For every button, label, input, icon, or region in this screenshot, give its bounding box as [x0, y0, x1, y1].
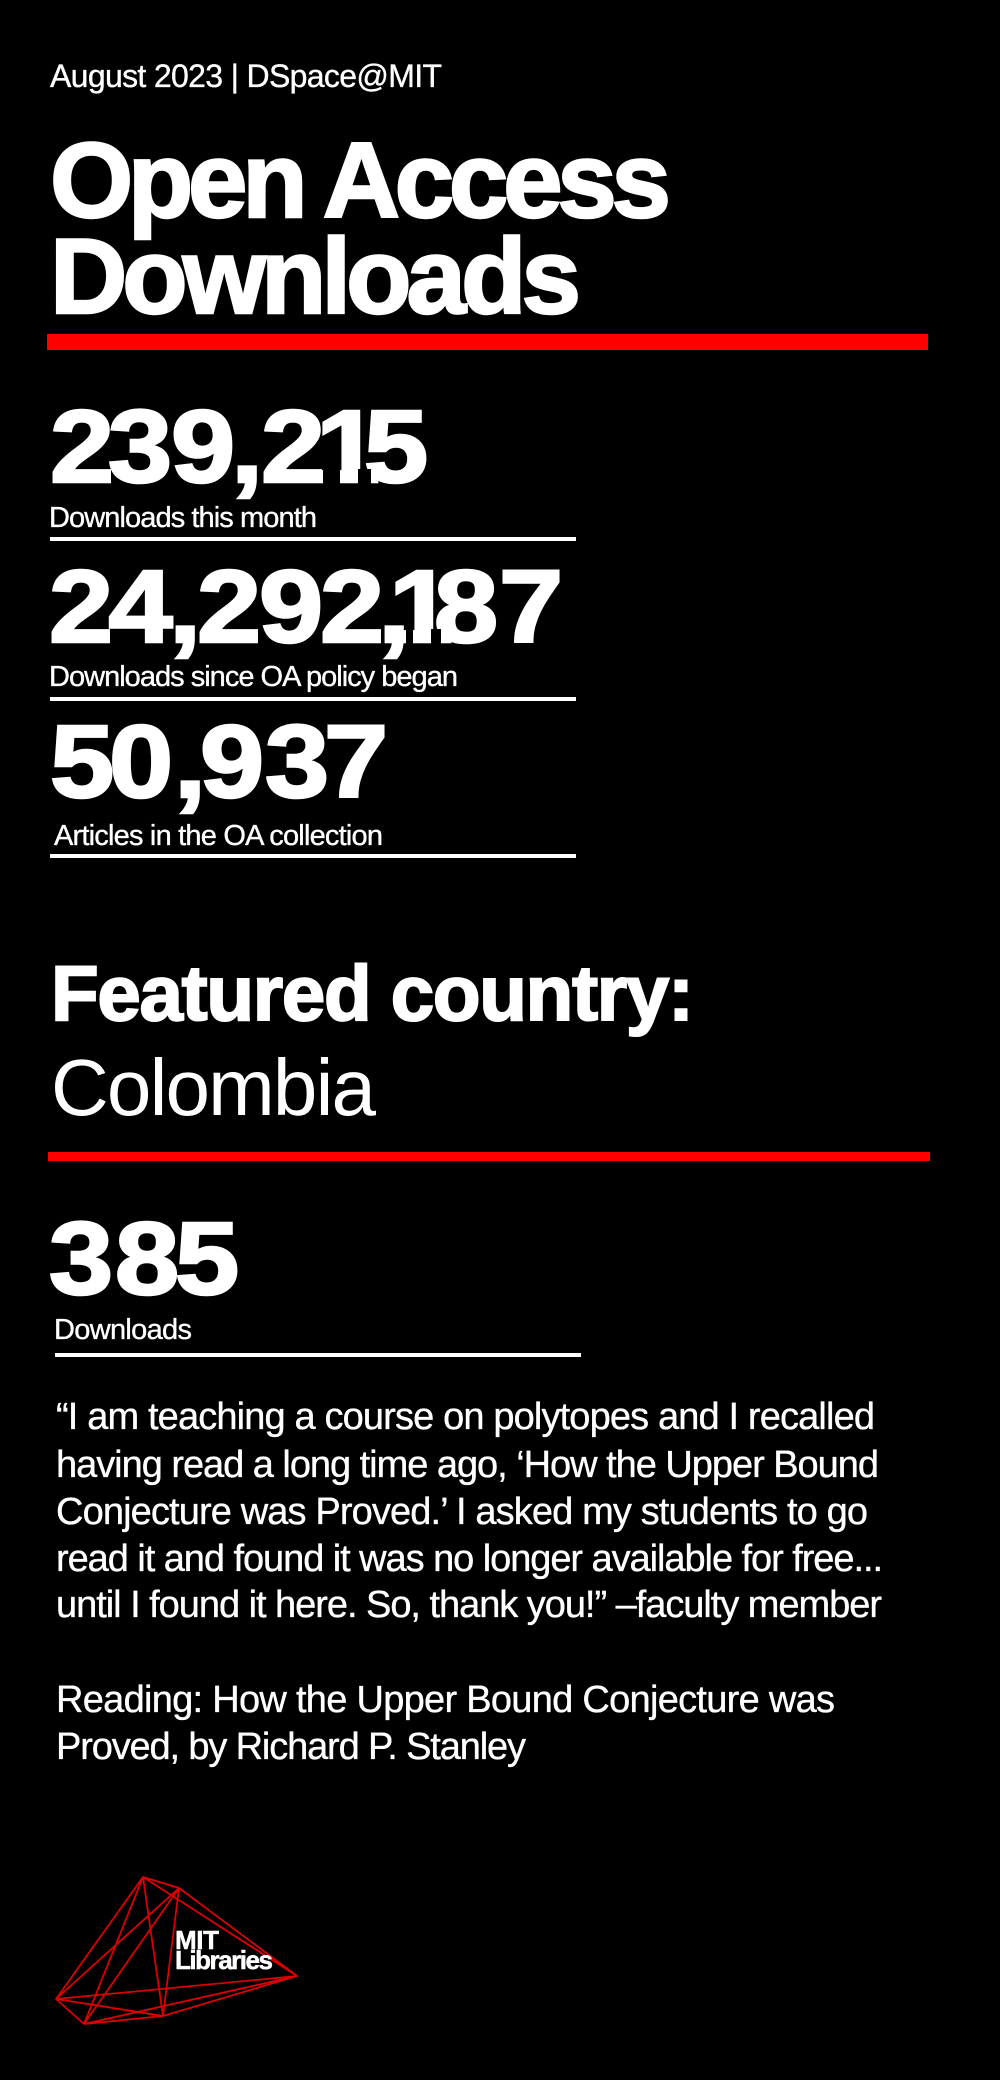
featured country red bar: [48, 1152, 930, 1161]
stat: Colombia downloads: Downloads: [54, 1314, 192, 1346]
title: Open Access: [50, 120, 671, 240]
stat: downloads since OA policy began: Downloads since OA policy began: [49, 661, 458, 693]
title red bar: [47, 334, 928, 350]
title: [50, 120, 671, 336]
title: Downloads: [50, 216, 581, 336]
MIT Libraries logo: [56, 1877, 297, 2024]
featured country heading: Featured country:: [51, 949, 694, 1037]
stat: articles in the OA collection: 50,937: [50, 705, 388, 820]
faculty quote: having read a long time ago, ‘How the Upper Bound: [56, 1444, 879, 1486]
faculty quote: read it and found it was no longer available for free...: [56, 1538, 883, 1580]
stat: downloads since OA policy began: 24,292,187: [49, 550, 563, 665]
stat: articles in the OA collection: [50, 705, 576, 858]
stat: downloads this month: 239,215: [50, 390, 428, 505]
reading citation: Proved, by Richard P. Stanley: [56, 1726, 526, 1768]
stat: downloads this month: Downloads this month: [49, 502, 317, 534]
stat: downloads this month: [49, 390, 576, 541]
reading citation: Reading: How the Upper Bound Conjecture was: [56, 1679, 835, 1721]
faculty quote: Conjecture was Proved.’ I asked my students to go: [56, 1491, 868, 1533]
stat: Colombia downloads: [49, 1202, 581, 1357]
reading citation: [56, 1679, 835, 1768]
MIT Libraries logo: MIT: [175, 1925, 219, 1955]
date and source line: August 2023 | DSpace@MIT: [50, 58, 442, 94]
featured country heading: [51, 949, 694, 1132]
MIT Libraries logo: Libraries: [175, 1945, 273, 1975]
faculty quote: “I am teaching a course on polytopes and I recalled: [56, 1396, 875, 1438]
faculty quote: until I found it here. So, thank you!” –faculty member: [56, 1584, 882, 1626]
stat: Colombia downloads: 385: [49, 1202, 239, 1317]
faculty quote: [56, 1396, 883, 1626]
featured country heading: Colombia: [51, 1043, 376, 1132]
stat: articles in the OA collection: Articles in the OA collection: [54, 820, 383, 852]
